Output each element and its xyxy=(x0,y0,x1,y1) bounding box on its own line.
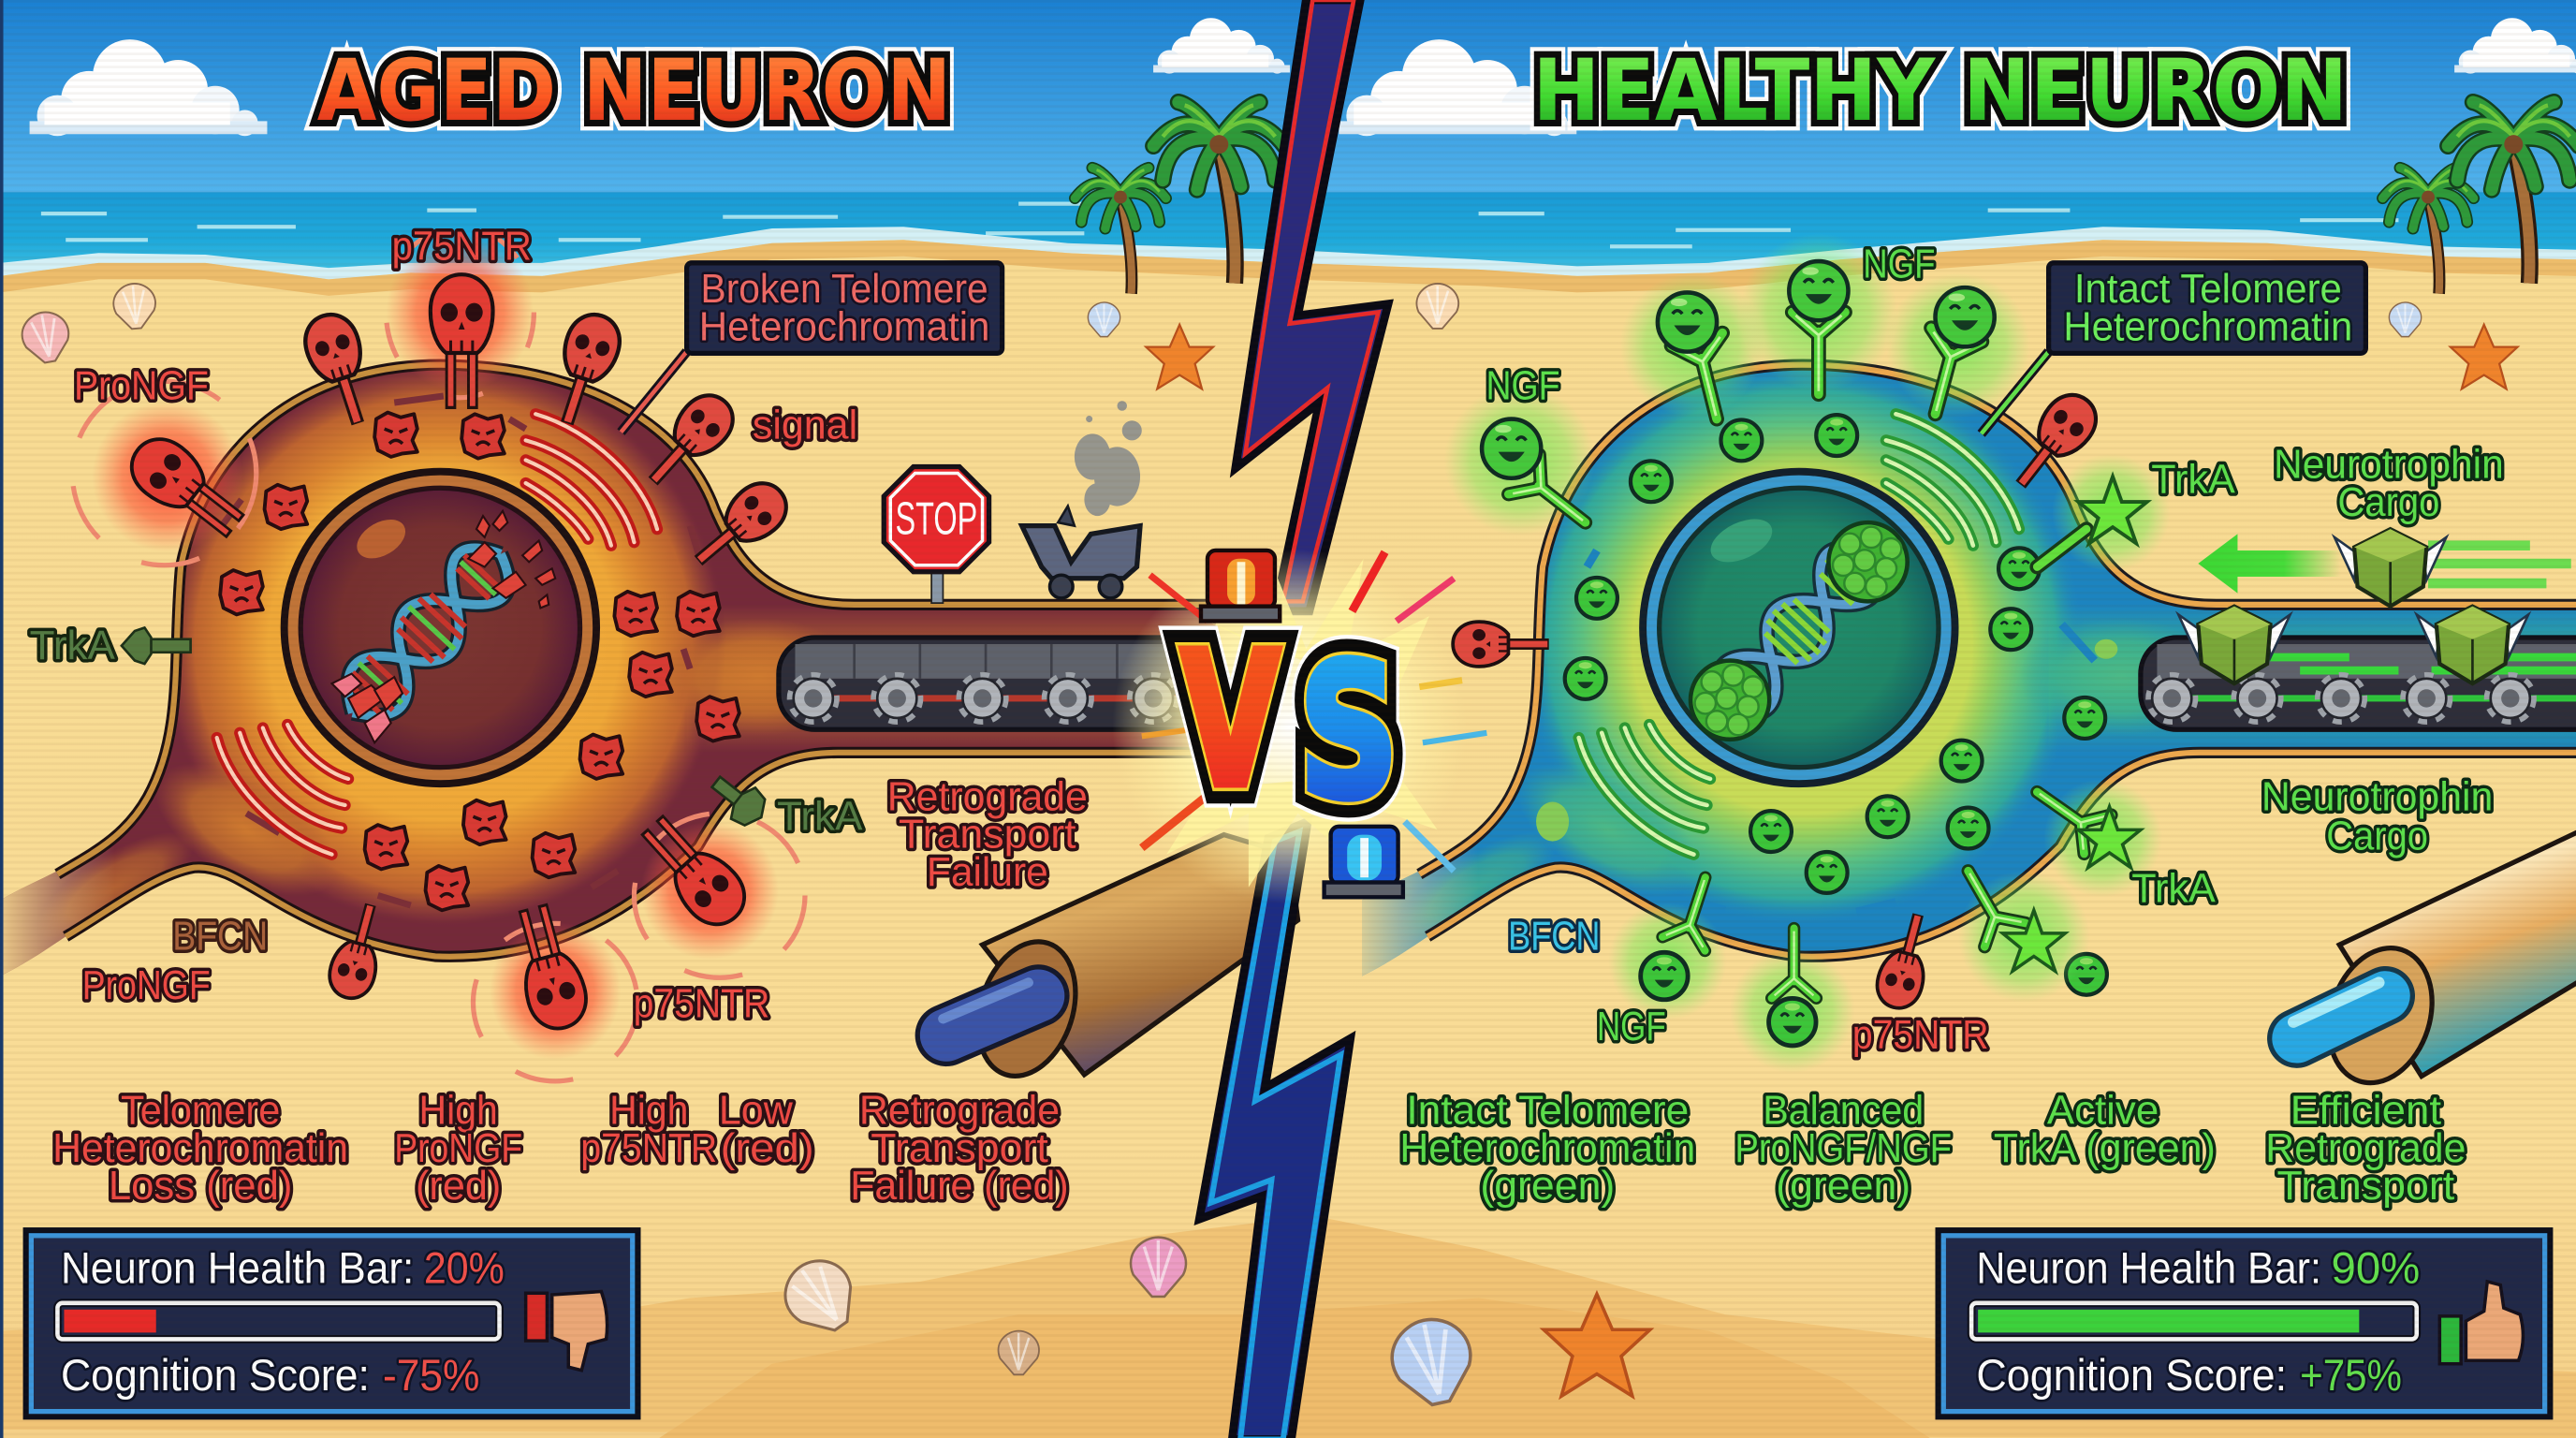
labels: aged neuron diagram: TrkA xyxy=(777,793,863,839)
labels: healthy neuron diagram: TrkA xyxy=(2151,457,2236,503)
red p75NTR skulls on healthy neuron xyxy=(1453,385,2106,1013)
labels: aged neuron diagram: ProNGF xyxy=(74,362,209,408)
callout: broken telomere: Heterochromatin xyxy=(699,303,989,349)
VS emblem: S xyxy=(1299,625,1398,839)
labels: healthy neuron summary row: TrkA (green) xyxy=(1994,1125,2216,1171)
cloud: upper left xyxy=(30,39,267,136)
labels: aged neuron summary row: Telomere xyxy=(121,1087,280,1133)
labels: aged neuron diagram: ProNGF xyxy=(82,962,211,1008)
red protein aggregates xyxy=(220,413,739,910)
panel: aged neuron status HUD xyxy=(26,1231,637,1416)
callout: broken telomere xyxy=(621,263,1003,433)
stop sign xyxy=(884,466,989,603)
callout: broken telomere: Broken Telomere xyxy=(701,266,988,312)
nucleus: healthy xyxy=(1643,472,1955,784)
lightning bolt: bottom, blue edged xyxy=(1199,822,1351,1438)
panel: aged neuron status HUD: 20% xyxy=(424,1244,505,1294)
labels: aged neuron diagram: signal xyxy=(753,403,857,448)
panel: healthy neuron status HUD xyxy=(1939,1231,2550,1416)
labels: healthy neuron diagram: BFCN xyxy=(1508,913,1600,959)
beach shells and starfish xyxy=(19,282,2518,1411)
labels: healthy neuron summary row: (green) xyxy=(1480,1163,1615,1209)
labels: healthy neuron diagram: TrkA xyxy=(2131,866,2216,912)
healthy receptors with NGF ligands xyxy=(1444,233,2170,1073)
VS burst xyxy=(1112,549,1486,903)
VS emblem: V xyxy=(1181,614,1280,828)
labels: aged neuron summary row: ProNGF xyxy=(394,1125,522,1171)
labels: aged neuron summary row xyxy=(52,1087,1069,1209)
conveyor: healthy axon xyxy=(2141,638,2576,729)
panel: healthy neuron status HUD: 90% xyxy=(2331,1244,2420,1294)
labels: healthy neuron summary row: Active xyxy=(2047,1087,2159,1133)
labels: healthy neuron diagram: Neurotrophin xyxy=(2274,442,2504,488)
nucleus: aged xyxy=(285,472,596,784)
labels: aged neuron summary row: Transport xyxy=(871,1125,1048,1171)
panel: healthy neuron status HUD: Neuron Health Bar: xyxy=(1976,1244,2321,1294)
conveyor: aged axon xyxy=(779,638,1209,729)
green arrow with flying cargo xyxy=(2198,529,2571,607)
siren: blue xyxy=(1325,827,1403,897)
labels: healthy neuron diagram: Cargo xyxy=(2326,813,2428,858)
labels: healthy neuron summary row: Transport xyxy=(2277,1163,2454,1209)
labels: aged neuron summary row: Heterochromatin xyxy=(52,1125,348,1171)
labels: aged neuron diagram: Transport xyxy=(899,812,1076,858)
Golgi arcs: healthy lower xyxy=(1579,725,1710,855)
panel: aged neuron status HUD: -75% xyxy=(383,1351,479,1401)
labels: aged neuron summary row: High xyxy=(419,1087,498,1133)
labels: aged neuron diagram: p75NTR xyxy=(392,223,532,269)
panel: healthy neuron cell body xyxy=(1355,329,2576,995)
background: wet sand band xyxy=(0,240,2576,296)
title: healthy neuron: HEALTHY NEURON xyxy=(1533,40,2348,140)
broken minecart xyxy=(1022,506,1140,598)
labels: healthy neuron summary row: Heterochromatin xyxy=(1399,1125,1695,1171)
background: lower dunes xyxy=(0,1216,2576,1438)
labels: aged neuron summary row: Failure (red) xyxy=(850,1163,1069,1209)
labels: aged neuron summary row: (red) xyxy=(416,1163,501,1209)
VS emblem: S xyxy=(1299,625,1398,839)
labels: aged neuron summary row: (red) xyxy=(721,1125,814,1171)
faded TrkA receptor: lower right xyxy=(704,767,773,833)
palm trees: left pair xyxy=(1075,102,1284,294)
background: sea xyxy=(0,192,2576,291)
background: sky xyxy=(0,0,2576,194)
DNA: broken telomere helix xyxy=(329,533,523,734)
labels: aged neuron diagram: p75NTR xyxy=(634,980,769,1026)
cloud: top right xyxy=(2454,18,2576,74)
labels: healthy neuron summary row: (green) xyxy=(1776,1163,1910,1209)
labels: healthy neuron diagram: Cargo xyxy=(2338,479,2439,525)
labels: healthy neuron summary row xyxy=(1399,1087,2466,1209)
VS emblem: S xyxy=(1299,625,1398,839)
labels: aged neuron summary row: Retrograde xyxy=(859,1087,1060,1133)
labels: healthy neuron summary row: ProNGF/NGF xyxy=(1734,1125,1952,1171)
lightning bolt: bottom inner blue edge xyxy=(1211,831,1340,1438)
labels: aged neuron diagram: BFCN xyxy=(172,913,268,959)
Golgi arcs: healthy upper xyxy=(1886,414,2019,546)
title: aged neuron: AGED NEURON xyxy=(317,40,951,140)
VS emblem: V xyxy=(1181,614,1280,828)
labels: aged neuron diagram xyxy=(30,223,1088,1026)
titles xyxy=(317,40,2348,140)
cloud: upper centre right xyxy=(1339,39,1576,136)
Golgi arcs: aged upper xyxy=(526,414,657,546)
cloud: top centre left xyxy=(1153,18,1290,74)
labels: aged neuron diagram: TrkA xyxy=(30,623,116,668)
DNA: intact helix with telomere caps xyxy=(1698,533,1892,734)
background: sea whitecaps xyxy=(41,204,2398,246)
DNA: broken ends fragments xyxy=(332,511,555,742)
myelin tube: healthy, with bright axon xyxy=(2293,829,2576,1096)
labels: aged neuron summary row: Low xyxy=(719,1087,793,1133)
green smiling neurotrophins xyxy=(1565,415,2107,995)
icon: thumbs up xyxy=(2439,1282,2523,1364)
panel: aged neuron cell body xyxy=(0,329,1249,986)
title: healthy neuron: HEALTHY NEURON xyxy=(1533,40,2348,140)
labels: healthy neuron summary row: Retrograde xyxy=(2265,1125,2466,1171)
labels: aged neuron summary row: Loss (red) xyxy=(109,1163,292,1209)
labels: aged neuron summary row: p75NTR xyxy=(580,1125,717,1171)
callout: intact telomere: Intact Telomere xyxy=(2074,266,2342,312)
labels: healthy neuron diagram: p75NTR xyxy=(1852,1012,1989,1058)
callout: intact telomere: Heterochromatin xyxy=(2063,303,2352,349)
lightning bolt: top, red edged xyxy=(1236,0,1388,611)
myelin tube: aged, with exposed dark axon xyxy=(943,835,1298,1089)
telomere cap: lower green cluster xyxy=(1690,661,1769,740)
stop sign: STOP xyxy=(896,493,977,544)
winged cargo boxes on conveyor xyxy=(2178,607,2528,683)
aged receptors and ProNGF skull ligands xyxy=(72,227,805,1081)
labels: aged neuron summary row: High xyxy=(609,1087,688,1133)
panel: healthy neuron status HUD: +75% xyxy=(2300,1351,2402,1401)
palm trees: right pair xyxy=(2382,102,2576,294)
background: dune highlight xyxy=(657,1299,1932,1438)
labels: healthy neuron diagram: NGF xyxy=(1486,362,1559,408)
labels: healthy neuron summary row: Efficient xyxy=(2291,1087,2441,1133)
siren: red xyxy=(1201,550,1280,621)
labels: healthy neuron diagram: NGF xyxy=(1863,242,1936,287)
VS emblem: S xyxy=(1299,625,1398,839)
labels: healthy neuron diagram: NGF xyxy=(1597,1004,1666,1049)
panel: aged neuron status HUD: Cognition Score: xyxy=(61,1351,370,1401)
icon: thumbs down xyxy=(526,1292,607,1371)
labels: aged neuron diagram: Retrograde xyxy=(887,773,1088,819)
labels: healthy neuron summary row: Balanced xyxy=(1763,1087,1924,1133)
callout: intact telomere xyxy=(1982,263,2365,433)
lightning bolt: top inner red edge xyxy=(1245,0,1379,601)
panel: aged neuron status HUD: Neuron Health Bar: xyxy=(61,1244,414,1294)
VS emblem: V xyxy=(1181,614,1280,828)
Golgi arcs: aged lower xyxy=(217,725,348,855)
health bar: 90 percent xyxy=(1971,1303,2417,1339)
panel: healthy neuron status HUD: Cognition Score: xyxy=(1976,1351,2287,1401)
labels: aged neuron diagram: Failure xyxy=(927,849,1048,895)
health bar: 20 percent xyxy=(57,1303,500,1339)
telomere cap: upper green cluster xyxy=(1828,522,1908,601)
faded TrkA receptor: left xyxy=(122,627,191,664)
VS emblem: V xyxy=(1181,614,1280,828)
VS emblem xyxy=(1181,614,1398,839)
labels: healthy neuron summary row: Intact Telomere xyxy=(1406,1087,1689,1133)
labels: healthy neuron diagram xyxy=(1486,242,2504,1058)
decorative left frame edge xyxy=(0,0,4,1438)
background: sea foam xyxy=(0,227,2576,296)
labels: healthy neuron diagram: Neurotrophin xyxy=(2261,773,2493,819)
title: aged neuron: AGED NEURON xyxy=(317,40,951,140)
smoke xyxy=(1075,401,1142,516)
